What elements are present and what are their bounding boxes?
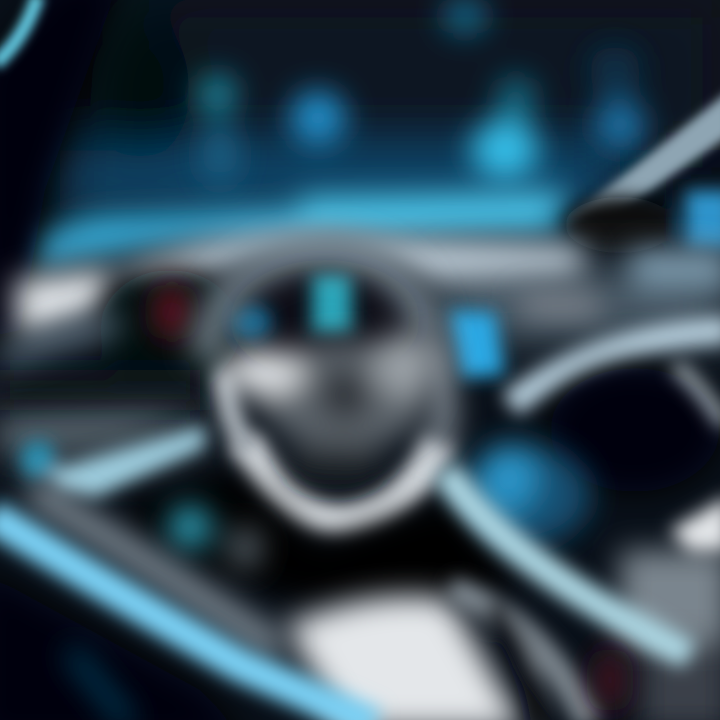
right dash midsection bbox=[520, 250, 720, 317]
bottom-left dark footwell bbox=[0, 570, 250, 720]
left lower light-blue panel bbox=[0, 410, 200, 450]
icon: top-left cyan arc bbox=[0, 0, 38, 64]
lower right red accent bbox=[596, 648, 624, 712]
steering wheel interior bbox=[230, 260, 420, 380]
left dash dark instrument cluster bbox=[0, 270, 240, 410]
lower console blue screen bbox=[460, 444, 590, 545]
windshield blue lights bbox=[197, 0, 646, 185]
right small trim bbox=[675, 365, 720, 425]
right roof strut bbox=[565, 90, 720, 222]
right curved dash trim bbox=[510, 330, 720, 405]
lower blue streak bbox=[70, 650, 130, 720]
seat dark curved stitching bbox=[450, 590, 590, 720]
centre cluster screen bbox=[228, 272, 352, 340]
console-side light band bbox=[445, 470, 690, 655]
red indicator bbox=[154, 284, 190, 340]
door panel and lower right grey bbox=[620, 550, 720, 720]
side infotainment screen bbox=[448, 310, 505, 378]
left pillar bbox=[0, 0, 120, 340]
white seat bbox=[285, 596, 525, 720]
dark block and blue light at right bbox=[565, 190, 720, 253]
bottom-left glowing cyan band bbox=[0, 515, 375, 720]
dashboard blue horizon band bbox=[25, 190, 570, 268]
band upper grey edge bbox=[30, 490, 280, 650]
upper windshield glow bbox=[60, 0, 720, 210]
steering wheel rim bbox=[205, 250, 443, 520]
lower button glow bbox=[168, 505, 263, 570]
left dash strip bbox=[0, 322, 120, 358]
steering wheel hub bbox=[222, 333, 437, 485]
lower dark console bbox=[120, 470, 520, 600]
dashboard upper white band bbox=[15, 233, 585, 338]
right dark speaker panel bbox=[550, 368, 720, 492]
door panel white bbox=[670, 495, 720, 552]
mid-section soft grey base bbox=[0, 270, 720, 460]
